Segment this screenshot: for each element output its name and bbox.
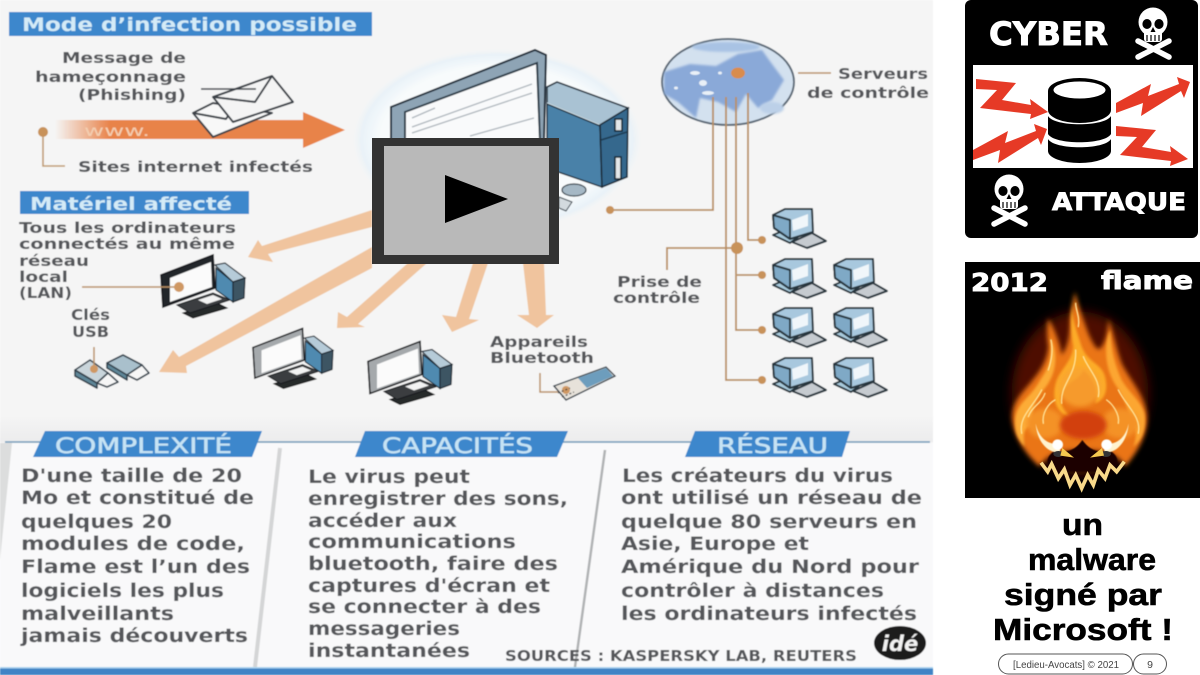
label: prise de contrôle xyxy=(613,273,702,307)
divider line xyxy=(5,441,930,443)
footer: page number xyxy=(1134,654,1166,674)
label: LAN computers: local xyxy=(19,268,68,286)
text: réseau: Les créateurs du virus xyxy=(622,466,893,487)
bottom bar xyxy=(0,667,933,675)
text: capacités: se connecter à des xyxy=(308,597,541,618)
heading: réseau xyxy=(685,431,850,458)
label: bluetooth devices: Appareils xyxy=(490,333,588,351)
icon: globe xyxy=(662,39,794,125)
panel: infographic xyxy=(0,0,933,675)
label: infected sites: Sites internet infectés xyxy=(78,158,313,176)
heading: mode d'infection: Mode d’infection possible xyxy=(22,14,357,36)
icon: envelopes xyxy=(193,76,293,137)
label: phishing message: hameçonnage xyxy=(35,68,186,86)
network dots xyxy=(606,206,766,384)
text: réseau: Amérique du Nord pour xyxy=(621,557,920,578)
caption: un malware signé par Microsoft: signé par xyxy=(1004,577,1162,612)
text: complexité: modules de code, xyxy=(21,534,245,555)
caption: un malware signé par Microsoft: malware xyxy=(1028,542,1156,577)
icon: red zigzag arrows xyxy=(973,77,1190,166)
heading: capacités xyxy=(355,431,568,458)
caption: un malware signé par Microsoft xyxy=(993,507,1173,647)
label: USB keys: Clés xyxy=(71,306,110,324)
heading: flame: flame xyxy=(1101,266,1193,295)
label: control servers: Serveurs xyxy=(838,65,928,83)
footer: copyright xyxy=(998,654,1132,674)
label: phishing message xyxy=(35,49,186,104)
text: complexité: Mo et constitué de xyxy=(21,488,254,509)
heading: mode d'infection xyxy=(9,12,372,36)
label: infected sites xyxy=(38,127,313,176)
label: phishing message: (Phishing) xyxy=(78,86,186,104)
heading: attaque: ATTAQUE xyxy=(1052,188,1186,216)
icon: LAN computer xyxy=(82,255,245,318)
text: capacités: instantanées xyxy=(308,641,470,662)
label: USB keys xyxy=(71,306,110,341)
text: complexité: D'une taille de 20 xyxy=(21,466,242,487)
label: USB keys: USB xyxy=(72,323,109,341)
text: capacités: messageries xyxy=(308,619,460,640)
text: capacités: captures d'écran et xyxy=(308,576,550,597)
text: réseau: Asie, Europe et xyxy=(621,534,809,555)
heading: capacités: CAPACITÉS xyxy=(382,433,533,458)
heading: matériel affecté xyxy=(20,191,249,215)
text: complexité: Flame est l’un des xyxy=(21,557,250,578)
text: capacités: bluetooth, faire des xyxy=(308,554,558,575)
caption: un malware signé par Microsoft: un xyxy=(1062,507,1103,542)
text: capacités: accéder aux xyxy=(308,511,457,532)
label: bluetooth devices xyxy=(490,333,594,367)
icon: main computer xyxy=(391,50,628,211)
label: LAN computers: (LAN) xyxy=(19,284,72,302)
text: complexité: jamais découverts xyxy=(20,626,248,647)
text: réseau xyxy=(621,466,922,625)
text: réseau: ont utilisé un réseau de xyxy=(621,488,922,509)
heading: réseau: RÉSEAU xyxy=(717,433,828,458)
heading: complexité xyxy=(33,431,262,458)
icon: USB keys xyxy=(75,347,149,388)
caption: un malware signé par Microsoft: Microsoft ! xyxy=(993,612,1173,647)
label: LAN computers: Tous les ordinateurs xyxy=(19,219,236,237)
text: complexité: logiciels les plus xyxy=(21,581,224,602)
label: LAN computers: connectés au même xyxy=(19,235,235,253)
logo: idé: idé xyxy=(882,632,918,656)
separators xyxy=(0,443,605,667)
footer: copyright: [Ledieu-Avocats] © 2021 xyxy=(1013,660,1119,671)
icon: bluetooth phone xyxy=(540,367,615,400)
text: complexité: quelques 20 xyxy=(21,512,172,533)
label: bluetooth devices: Bluetooth xyxy=(490,349,594,367)
icon: skull bottom xyxy=(994,174,1025,224)
icon: computer 2 xyxy=(253,328,333,389)
label: LAN computers xyxy=(19,219,236,302)
label: prise de contrôle: contrôle xyxy=(613,289,700,307)
icon: database xyxy=(1048,78,1111,163)
network lines xyxy=(610,93,762,380)
heading: complexité: COMPLEXITÉ xyxy=(55,433,232,458)
text: réseau: les ordinateurs infectés xyxy=(621,604,917,625)
heading: cyber: CYBER xyxy=(989,15,1108,53)
label: prise de contrôle: Prise de xyxy=(617,273,702,291)
arrows: propagation xyxy=(159,210,554,373)
heading: matériel affecté: Matériel affecté xyxy=(30,194,232,215)
label: control servers: de contrôle xyxy=(807,84,929,102)
text: capacités: Le virus peut xyxy=(308,467,470,488)
icon: computer 3 xyxy=(368,342,452,404)
panel: flame image xyxy=(965,262,1200,498)
sources: SOURCES : KASPERSKY LAB, REUTERS xyxy=(505,647,857,665)
icon: flaming face xyxy=(1012,292,1148,488)
text: complexité xyxy=(20,466,254,647)
glow behind computer xyxy=(351,48,643,232)
arrow: www: www. xyxy=(84,122,150,140)
video play overlay xyxy=(372,138,559,264)
icons: infected computers xyxy=(773,209,887,397)
text: réseau: quelque 80 serveurs en xyxy=(621,512,917,533)
text: capacités: communications xyxy=(308,532,516,553)
text: réseau: contrôler à distances xyxy=(621,581,884,602)
label: phishing message: Message de xyxy=(62,49,186,67)
logo: idé xyxy=(874,626,926,660)
text: capacités: enregistrer des sons, xyxy=(308,489,568,510)
heading: 2012: 2012 xyxy=(971,268,1048,297)
label: LAN computers: réseau xyxy=(19,252,89,270)
icon: skull top xyxy=(1138,8,1169,57)
panel: cyber attaque badge xyxy=(965,0,1198,238)
label: control servers xyxy=(798,65,929,102)
arrow: www xyxy=(55,112,345,148)
text: complexité: malveillants xyxy=(21,604,174,625)
footer: page number: 9 xyxy=(1147,659,1153,671)
text: capacités xyxy=(308,467,568,662)
